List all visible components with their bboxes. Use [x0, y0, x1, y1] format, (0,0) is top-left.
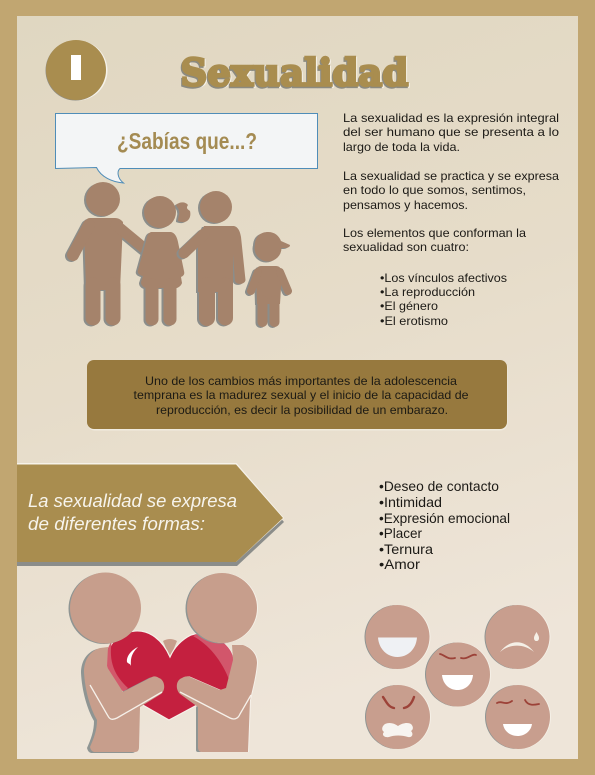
figure: boy with cap	[251, 232, 290, 322]
title: Sexualidad	[182, 52, 410, 96]
list: forms of expression: •Deseo de contacto	[379, 478, 499, 494]
list: forms of expression: •Placer	[379, 525, 422, 541]
arrow banner	[17, 463, 284, 566]
section number badge	[46, 40, 108, 100]
callout: adolescence: temprana es la madurez sexual y el inicio de la capacidad de	[134, 388, 469, 402]
face: happy closed eyes	[485, 685, 551, 749]
title: Sexualidad	[180, 52, 408, 96]
list: forms of expression: •Ternura	[379, 541, 433, 557]
figure: left person body and arm	[84, 647, 164, 752]
list: elements of sexuality: •El género	[380, 299, 438, 313]
intro text block: del ser humano que se presenta a lo	[343, 125, 559, 139]
list: elements of sexuality: •La reproducción	[380, 285, 475, 299]
list: forms of expression	[379, 478, 510, 572]
figure: right person body and arm	[177, 645, 257, 752]
intro text block: sexualidad son cuatro:	[343, 240, 469, 254]
banner text	[28, 490, 237, 534]
intro text block: La sexualidad es la expresión integral	[343, 111, 559, 125]
callout: adolescence	[87, 360, 508, 430]
face: laughing	[425, 642, 491, 706]
callout: adolescence: Uno de los cambios más importantes de la adolescencia	[145, 374, 457, 388]
intro text block: Los elementos que conforman la	[343, 226, 526, 240]
list: elements of sexuality: •Los vínculos afectivos	[380, 271, 507, 285]
callout: adolescence: reproducción, es decir la posibilidad de un embarazo.	[156, 403, 448, 417]
icon: family silhouettes	[73, 182, 290, 322]
face: angry	[365, 685, 431, 749]
speech bubble	[56, 114, 318, 183]
intro text block: largo de toda la vida.	[343, 140, 460, 154]
icon: red heart	[106, 631, 235, 720]
illustration: couple holding heart	[68, 572, 258, 752]
intro text block: pensamos y hacemos.	[343, 198, 468, 212]
intro text block: La sexualidad se practica y se expresa	[343, 169, 559, 183]
figure: adult right	[184, 191, 246, 318]
figure: mother	[138, 196, 190, 319]
figure: left head	[68, 572, 141, 644]
list: forms of expression: •Amor	[379, 556, 420, 572]
bubble heading: ¿Sabías que...?	[117, 128, 257, 154]
banner text: de diferentes formas:	[28, 513, 205, 534]
intro text block: en todo lo que somos, sentimos,	[343, 183, 526, 197]
title: Sexualidad	[180, 50, 408, 94]
face: smiling	[364, 605, 430, 669]
figure: father	[73, 182, 145, 318]
face: sad with tear	[484, 605, 550, 669]
list: elements of sexuality: •El erotismo	[380, 314, 448, 328]
figure: right head	[186, 573, 258, 644]
list: forms of expression: •Intimidad	[379, 494, 442, 510]
intro text block	[343, 111, 559, 254]
list: forms of expression: •Expresión emocional	[379, 510, 510, 526]
banner text: La sexualidad se expresa	[28, 490, 237, 511]
list: elements of sexuality	[380, 271, 507, 328]
